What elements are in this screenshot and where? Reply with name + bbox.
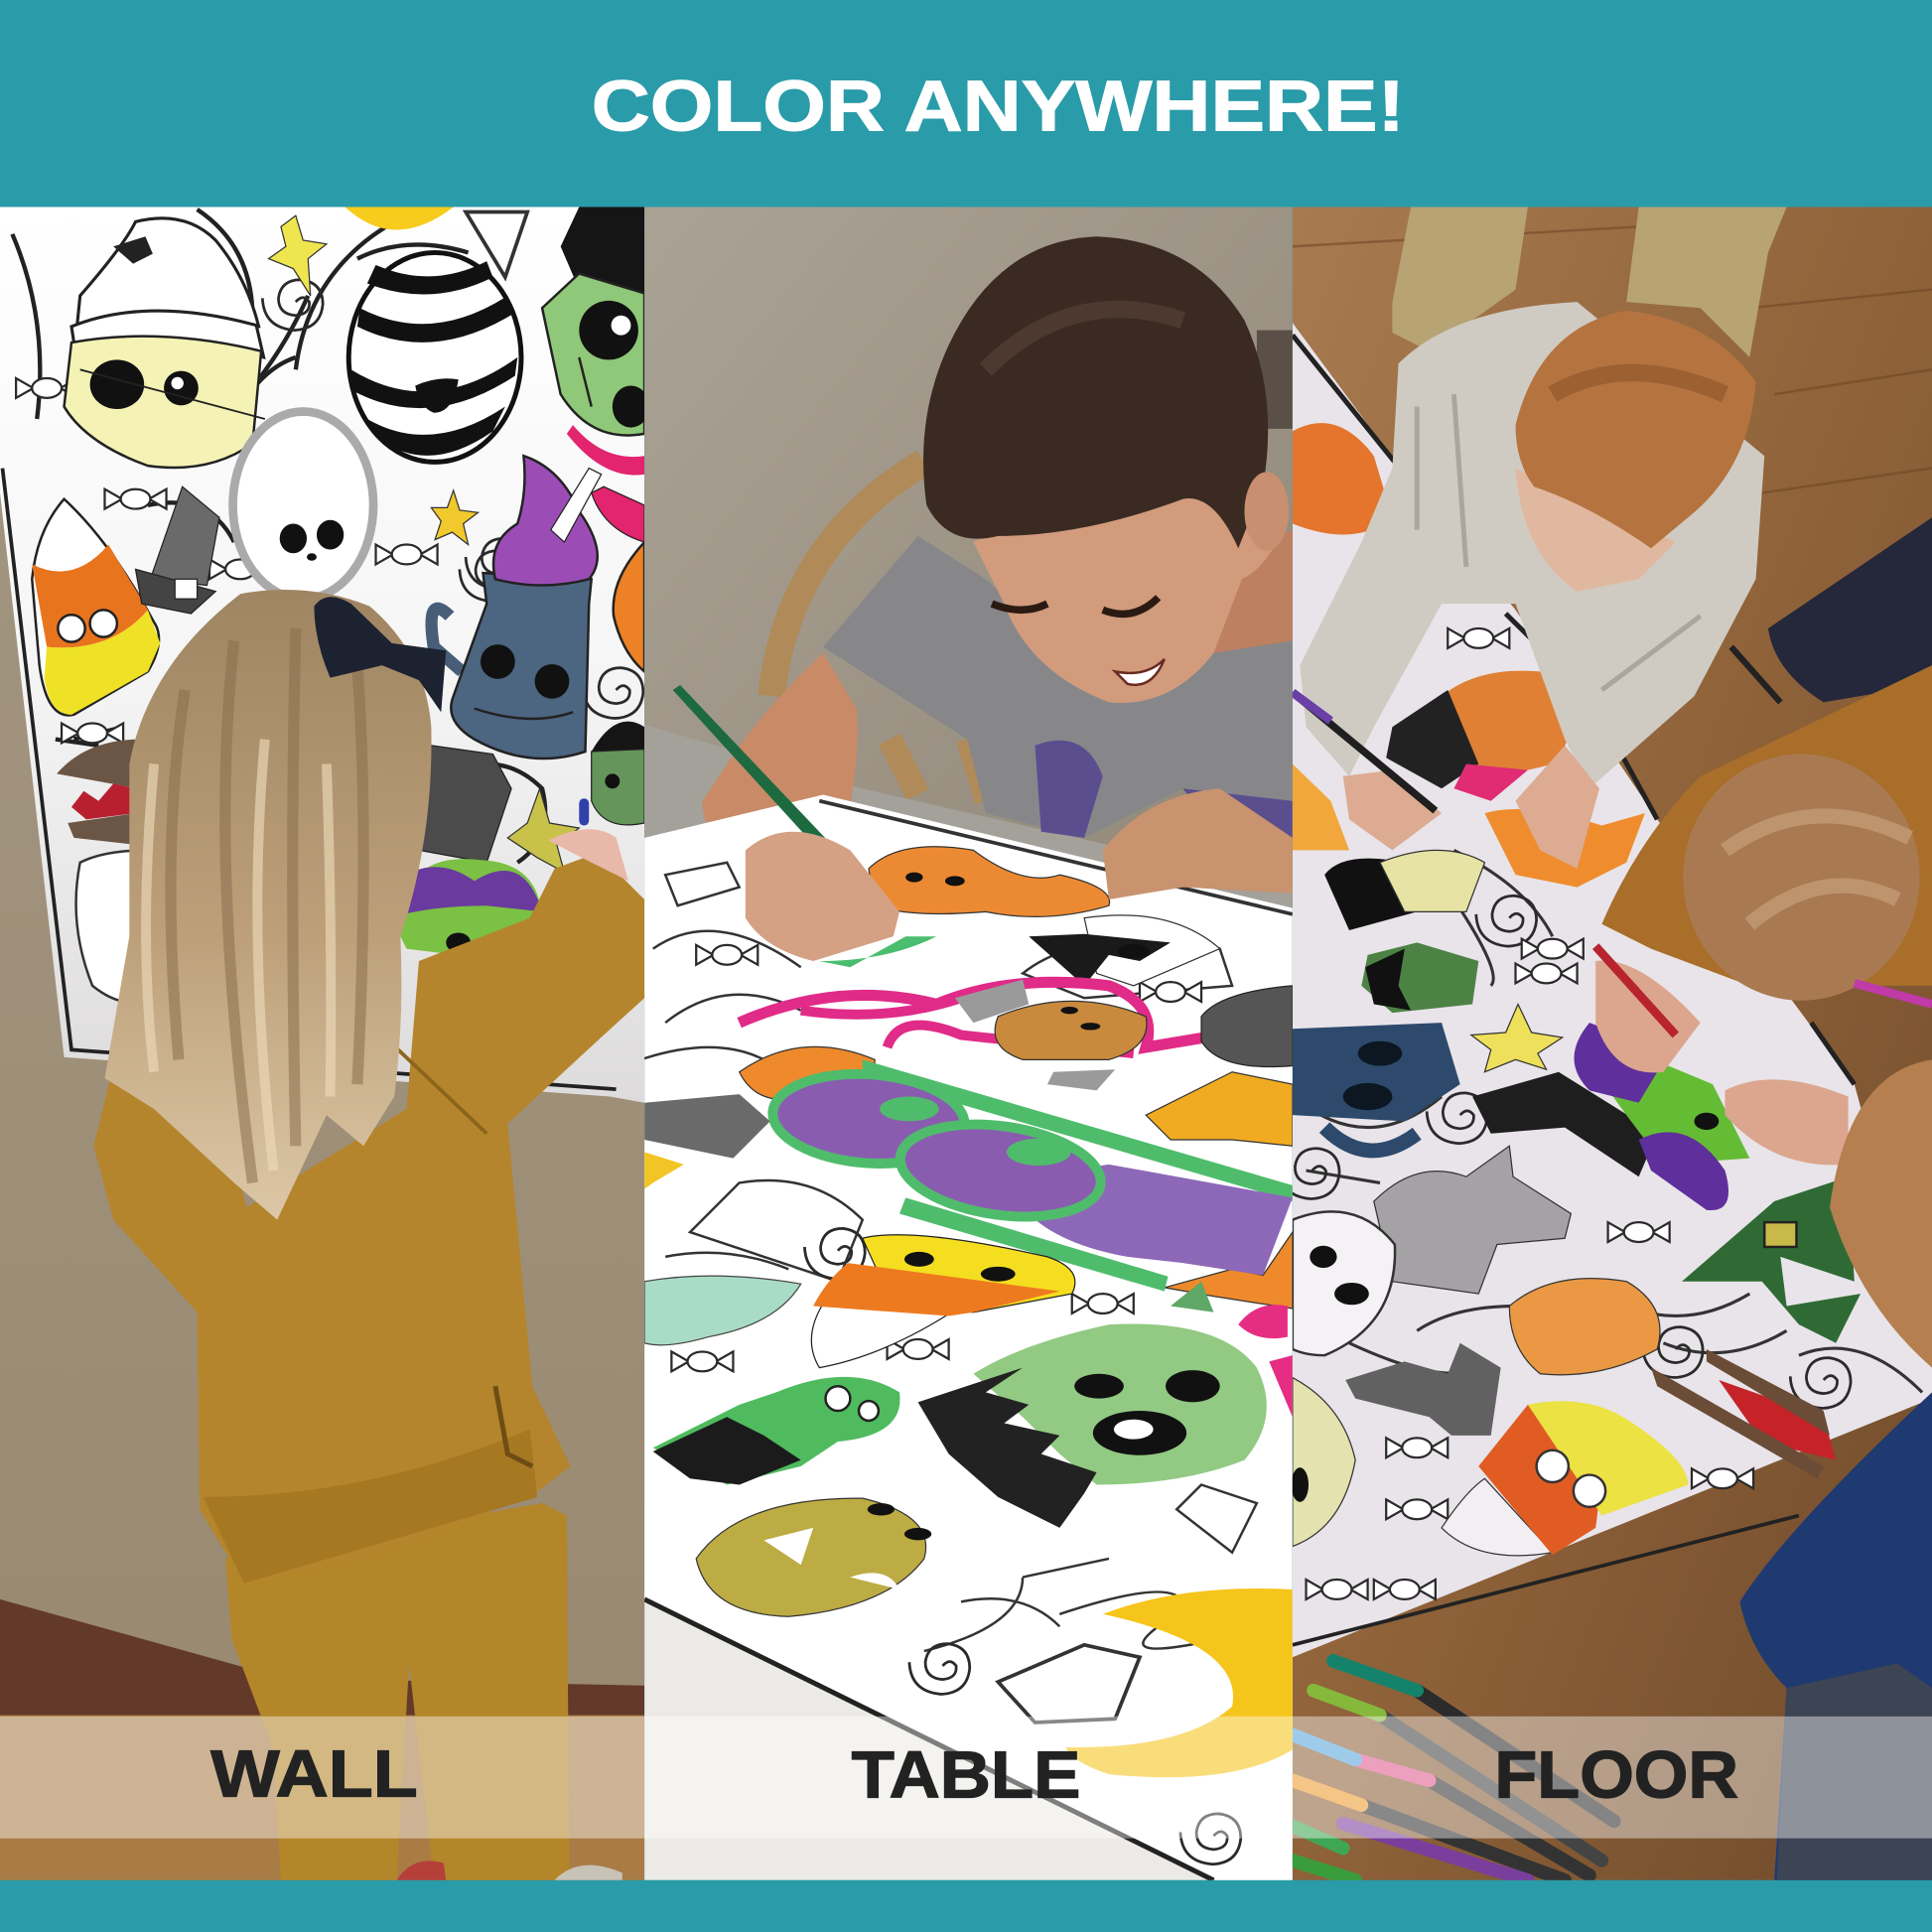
big frankenstein <box>918 1282 1293 1528</box>
yellow vampire <box>1324 850 1484 930</box>
coloring poster on table <box>640 794 1293 1880</box>
pirate ghost character <box>65 218 265 468</box>
boy top in white sweater <box>1293 207 1787 869</box>
blue mug <box>1293 1023 1460 1151</box>
child right blue <box>1739 1059 1932 1880</box>
stars <box>269 215 327 296</box>
table surface bottom <box>644 1589 1293 1880</box>
orange pumpkin <box>869 847 1110 916</box>
green frankenstein <box>1361 942 1478 1013</box>
yellow moon <box>1066 1588 1293 1777</box>
sweater <box>93 853 644 1584</box>
gray witch hat <box>136 486 219 614</box>
panel: table photo <box>640 207 1293 1880</box>
dark trousers <box>1768 517 1932 702</box>
arm <box>703 653 858 823</box>
hair <box>104 590 432 1220</box>
yellow star <box>644 1152 684 1189</box>
label bar: wall <box>0 1717 644 1839</box>
girl <box>93 590 644 1880</box>
white ghost <box>1293 1211 1395 1355</box>
candy corn <box>811 1235 1075 1368</box>
yellow pumpkin <box>1146 1072 1293 1146</box>
small green frankenstein <box>653 1377 899 1484</box>
red monster mouth <box>1651 1349 1836 1478</box>
witch hat and green monster <box>400 745 539 953</box>
pencil <box>1293 692 1436 811</box>
pink loop and brown pumpkin <box>740 980 1220 1090</box>
jack-o-lantern <box>740 1046 875 1099</box>
wood floor <box>1293 207 1932 1880</box>
footer band <box>0 1880 1932 1932</box>
outline mummy lower left <box>74 850 129 1002</box>
pink strip <box>499 946 530 961</box>
panel: floor photo <box>1279 207 1932 1880</box>
orange pumpkin lower <box>1509 1279 1660 1375</box>
blue marker <box>579 798 589 826</box>
moon top <box>345 207 454 229</box>
ear <box>1244 472 1289 551</box>
eyes and mouth <box>992 598 1159 614</box>
panel: wall photo <box>0 207 649 1880</box>
gray witch hat <box>644 1094 770 1159</box>
table top <box>644 725 1293 986</box>
label: TABLE: TABLE <box>852 1738 1080 1813</box>
orange lower right <box>1165 1232 1293 1309</box>
boy hands and pencil <box>673 685 1293 961</box>
t-shirt <box>823 536 1293 838</box>
candy corn <box>32 499 160 715</box>
black witch hat <box>1472 1072 1657 1176</box>
label: FLOOR: FLOOR <box>1494 1738 1738 1813</box>
pants <box>225 1503 569 1880</box>
hair <box>923 236 1268 548</box>
orange pumpkin right <box>614 542 644 671</box>
mummy character <box>348 252 521 462</box>
label bar: floor <box>1293 1717 1932 1839</box>
green witch hat <box>1682 1176 1861 1343</box>
BOO letters <box>769 1059 1293 1292</box>
face <box>1516 469 1676 592</box>
wall background <box>0 492 644 1880</box>
coloring poster on floor <box>1279 323 1932 1657</box>
dark object right <box>1257 331 1293 429</box>
markers <box>1293 1661 1614 1880</box>
shoe <box>397 1861 446 1880</box>
monster mouth burger <box>57 740 142 844</box>
label: WALL: WALL <box>210 1736 418 1811</box>
hand <box>548 829 628 881</box>
wall <box>644 207 1293 996</box>
head <box>973 498 1273 703</box>
frankenstein head top right <box>542 207 649 542</box>
skirting board <box>0 1599 644 1725</box>
olive pumpkin <box>696 1498 931 1616</box>
header band <box>0 0 1932 207</box>
gray witch hat small <box>1345 1343 1501 1436</box>
green scribble under pencil <box>819 936 936 967</box>
khaki legs <box>1392 207 1528 351</box>
dark pirate pumpkin <box>1201 986 1293 1067</box>
hands <box>1343 770 1442 850</box>
uncolored zombie <box>1029 915 1220 986</box>
boy <box>702 236 1293 888</box>
purple frosting mug <box>432 456 602 759</box>
cream ghost <box>1293 1378 1355 1547</box>
yellow star <box>1471 1004 1563 1072</box>
label bar: table <box>644 1717 1293 1839</box>
magic mirror with skull <box>233 412 373 599</box>
neck <box>1213 530 1293 653</box>
candy corn <box>1442 1401 1688 1556</box>
green and purple monster <box>1574 1023 1749 1210</box>
gray gingerbread <box>1374 1146 1571 1294</box>
hair <box>1516 311 1756 548</box>
title: COLOR ANYWHERE! <box>592 68 1405 147</box>
shirt print <box>1035 741 1293 838</box>
orange pumpkins <box>1293 423 1392 534</box>
potion flask <box>466 211 527 277</box>
child middle <box>1595 665 1932 1165</box>
wooden floor <box>0 1716 644 1880</box>
coloring poster on wall <box>0 207 649 1103</box>
hair bow <box>314 597 446 712</box>
small frankenstein <box>592 722 644 825</box>
mint ghost <box>644 1276 801 1345</box>
sweater <box>1300 302 1764 788</box>
wooden chair <box>771 462 986 801</box>
